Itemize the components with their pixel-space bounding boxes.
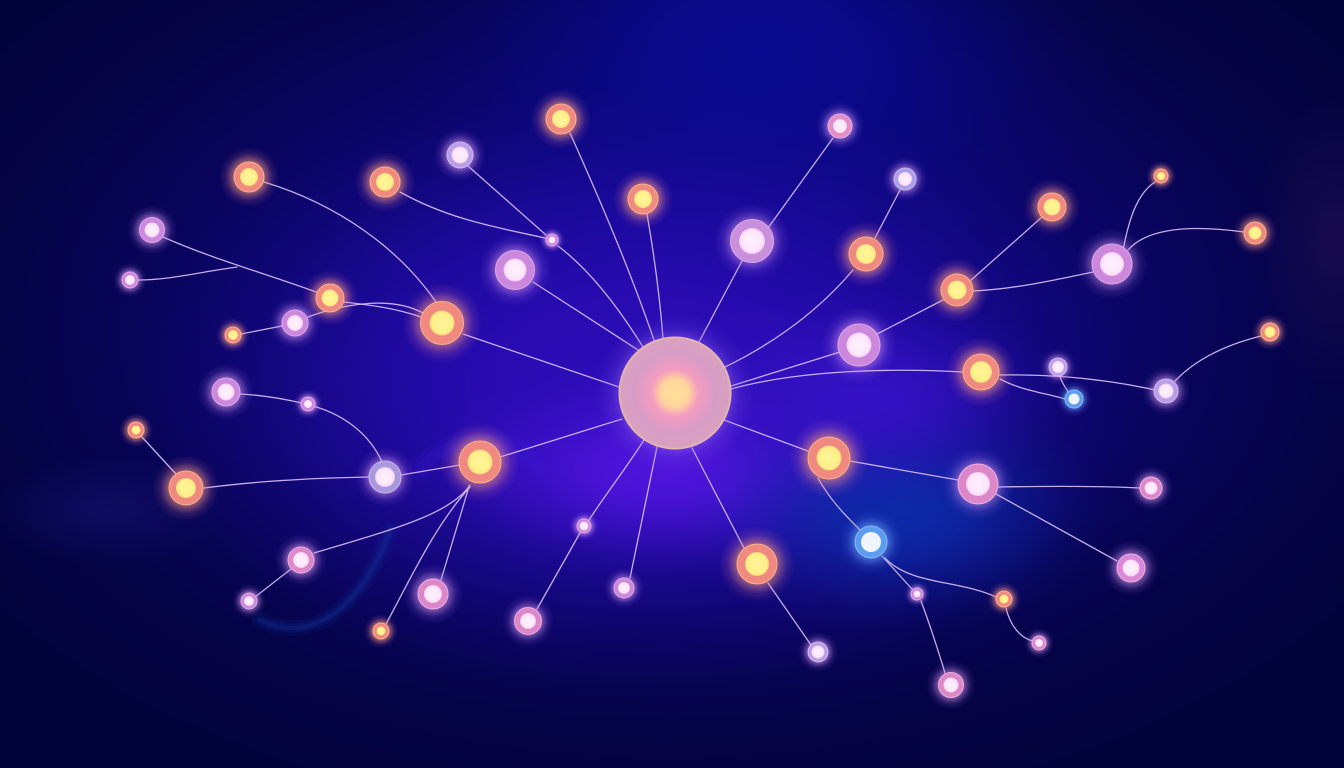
central hub: [595, 313, 755, 473]
pink nodes: [113, 102, 1190, 710]
orange nodes: [119, 89, 1288, 648]
blue nodes: [839, 381, 1092, 574]
connection lines: [138, 133, 1261, 673]
